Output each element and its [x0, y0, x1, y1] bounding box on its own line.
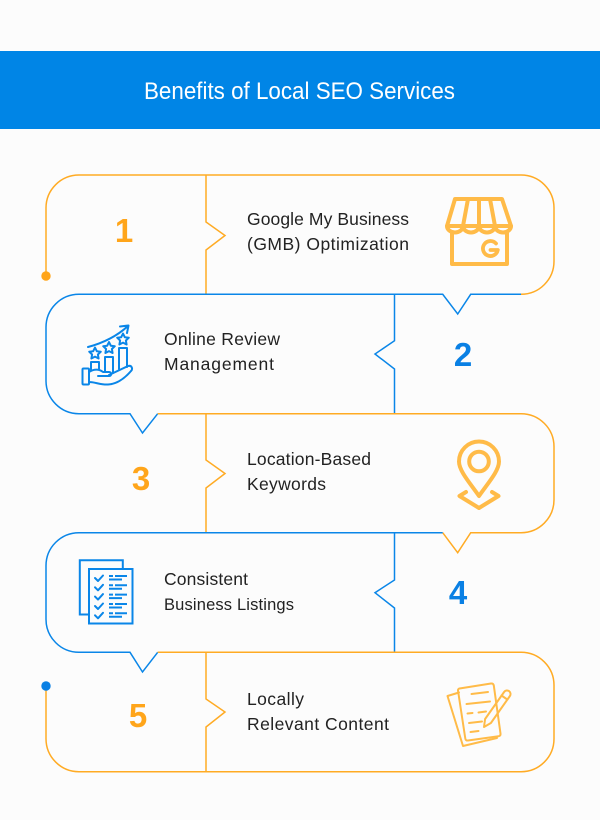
step 5 label: [247, 689, 389, 734]
number 3: 3: [132, 460, 150, 497]
step 4 label: [164, 569, 294, 614]
step 5 label: Relevant Content: [247, 714, 389, 734]
icon: location pin: [459, 442, 499, 508]
panel: step 5 Locally Relevant Content: [41, 652, 554, 772]
step 2 label: Management: [164, 354, 274, 374]
icon: rising star ratings on a hand: [82, 326, 132, 385]
step 1 label: (GMB) Optimization: [247, 234, 409, 254]
step 4 label: Consistent: [164, 569, 248, 589]
step 3 label: Keywords: [247, 474, 326, 494]
panel: step 1 Google My Business Optimization: [41, 175, 554, 294]
end dot: [41, 681, 51, 691]
icon: papers and pencil: [448, 683, 511, 746]
number 2: 2: [454, 336, 472, 373]
panel: step 2 Online Review Management: [46, 294, 521, 433]
step 4 label: Business Listings: [164, 596, 294, 614]
step 3 label: Location-Based: [247, 449, 371, 469]
step 2 label: Online Review: [164, 329, 280, 349]
number 4: 4: [449, 574, 468, 611]
panel: step 3 Location-Based Keywords: [132, 414, 554, 553]
icon: checklist documents: [80, 560, 132, 624]
start dot: [41, 271, 51, 281]
number 5: 5: [129, 697, 147, 734]
step 3 label: [247, 449, 371, 494]
panel: step 4 Consistent Business Listings: [46, 533, 468, 672]
number 1: 1: [115, 212, 133, 249]
icon: storefront with G: [447, 199, 511, 264]
step 2 label: [164, 329, 280, 374]
title banner: [0, 51, 600, 129]
step 1 label: [247, 209, 409, 254]
step 5 label: Locally: [247, 689, 304, 709]
step 1 label: Google My Business: [247, 209, 409, 229]
title: Benefits of Local SEO Services: [144, 78, 455, 105]
